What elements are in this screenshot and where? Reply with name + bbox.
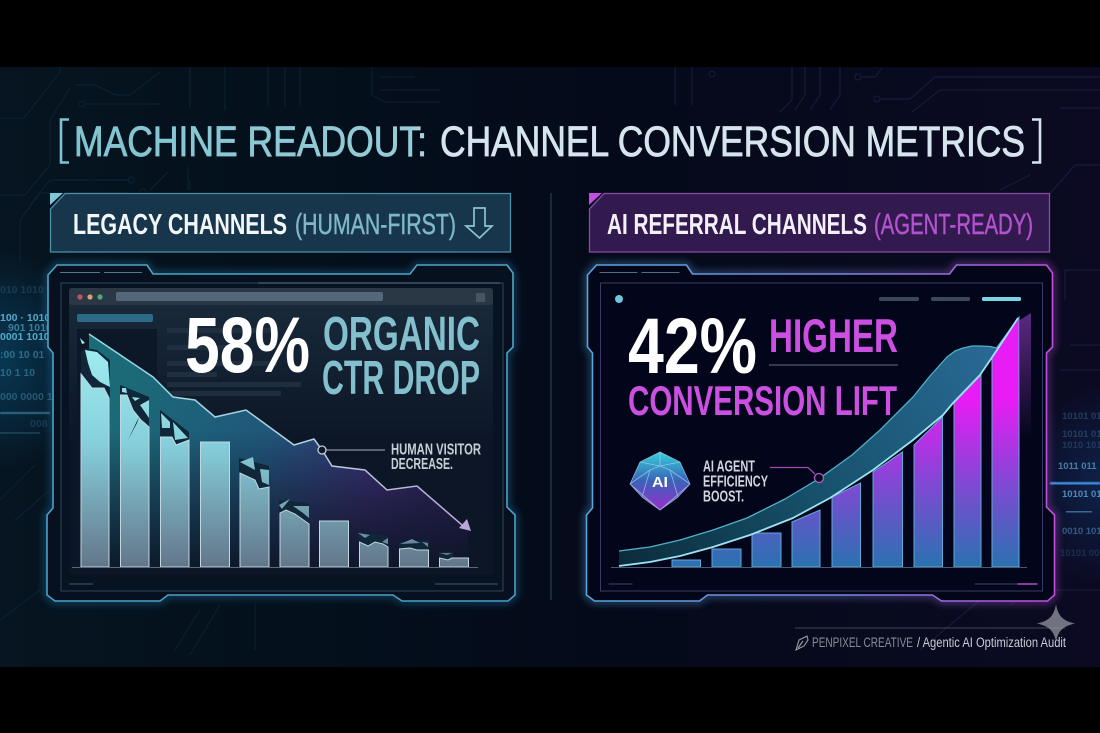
binary data stream: left: 901 1010 (8, 322, 52, 334)
area chart: decline (89, 334, 468, 567)
callout: AI agent efficiency boost: AI AGENT (703, 458, 755, 476)
callout: AI agent efficiency boost (703, 458, 824, 506)
stat label: higher conversion lift (628, 309, 898, 424)
binary data stream: left (0, 284, 59, 434)
header: legacy channels: LEGACY CHANNELS (73, 209, 287, 241)
binary data stream: right: 10101 00 (1060, 548, 1100, 559)
title (61, 118, 1040, 166)
icon: pen (796, 636, 808, 650)
stat label: organic CTR drop (322, 308, 480, 405)
bar chart: AI (672, 313, 1031, 567)
footer credit: PENPIXEL CREATIVE (812, 635, 913, 650)
binary data stream: right (1050, 411, 1100, 559)
stat label: organic CTR drop: CTR DROP (322, 352, 480, 405)
HUD frame: legacy (47, 265, 515, 601)
callout: human visitor decrease: HUMAN VISITOR (391, 442, 481, 458)
footer credit (795, 628, 1066, 650)
callout: human visitor decrease: DECREASE. (391, 456, 453, 473)
binary data stream: left: 100 · 1010 (0, 312, 50, 324)
icon: sparkle watermark (1037, 604, 1075, 642)
trend line with arrow (89, 334, 471, 531)
binary data stream: left: 10 1 10 (0, 367, 35, 379)
growth band curve (619, 318, 1018, 566)
binary data stream: left: 0001 1010 (0, 331, 50, 343)
binary data stream: left: 008 (30, 418, 48, 430)
panel: AI referral channels (586, 193, 1054, 601)
window controls (615, 295, 1021, 303)
binary data stream: left: :00 10 01 (0, 349, 45, 361)
stat label: higher conversion lift: CONVERSION LIFT (628, 377, 897, 424)
big stat: 58%: 58% (185, 300, 310, 389)
header: AI referral channels (589, 193, 1050, 252)
header: AI referral channels: (AGENT-READY) (874, 209, 1033, 241)
stat label: organic CTR drop: ORGANIC (323, 308, 480, 361)
binary data stream: left: 000 0000 10 (0, 391, 59, 403)
browser window (69, 288, 493, 575)
binary data stream: left: 010 1010 (0, 284, 44, 296)
callout: human visitor decrease (318, 442, 481, 473)
icon: AI gem: AI (652, 474, 668, 491)
panel: legacy channels (47, 193, 515, 601)
HUD frame: AI (586, 265, 1054, 601)
stat label: higher conversion lift: HIGHER (769, 309, 898, 362)
header: legacy channels (50, 193, 510, 252)
callout: AI agent efficiency boost: BOOST. (703, 488, 744, 506)
binary data stream: right: 1011 011 (1058, 461, 1097, 472)
title: MACHINE READOUT: (74, 118, 427, 166)
baseline: legacy (72, 566, 478, 568)
big stat: 42%: 42% (628, 301, 757, 390)
callout: AI agent efficiency boost: EFFICIENCY (703, 474, 768, 490)
footer credit: / Agentic AI Optimization Audit (917, 635, 1066, 650)
header: AI referral channels: AI REFERRAL CHANNELS (607, 209, 867, 241)
icon: AI gem (630, 452, 690, 510)
baseline: AI (611, 566, 1027, 568)
bar chart: legacy (80, 338, 468, 567)
header: legacy channels: (HUMAN-FIRST) (295, 209, 456, 241)
centre divider (550, 193, 552, 600)
